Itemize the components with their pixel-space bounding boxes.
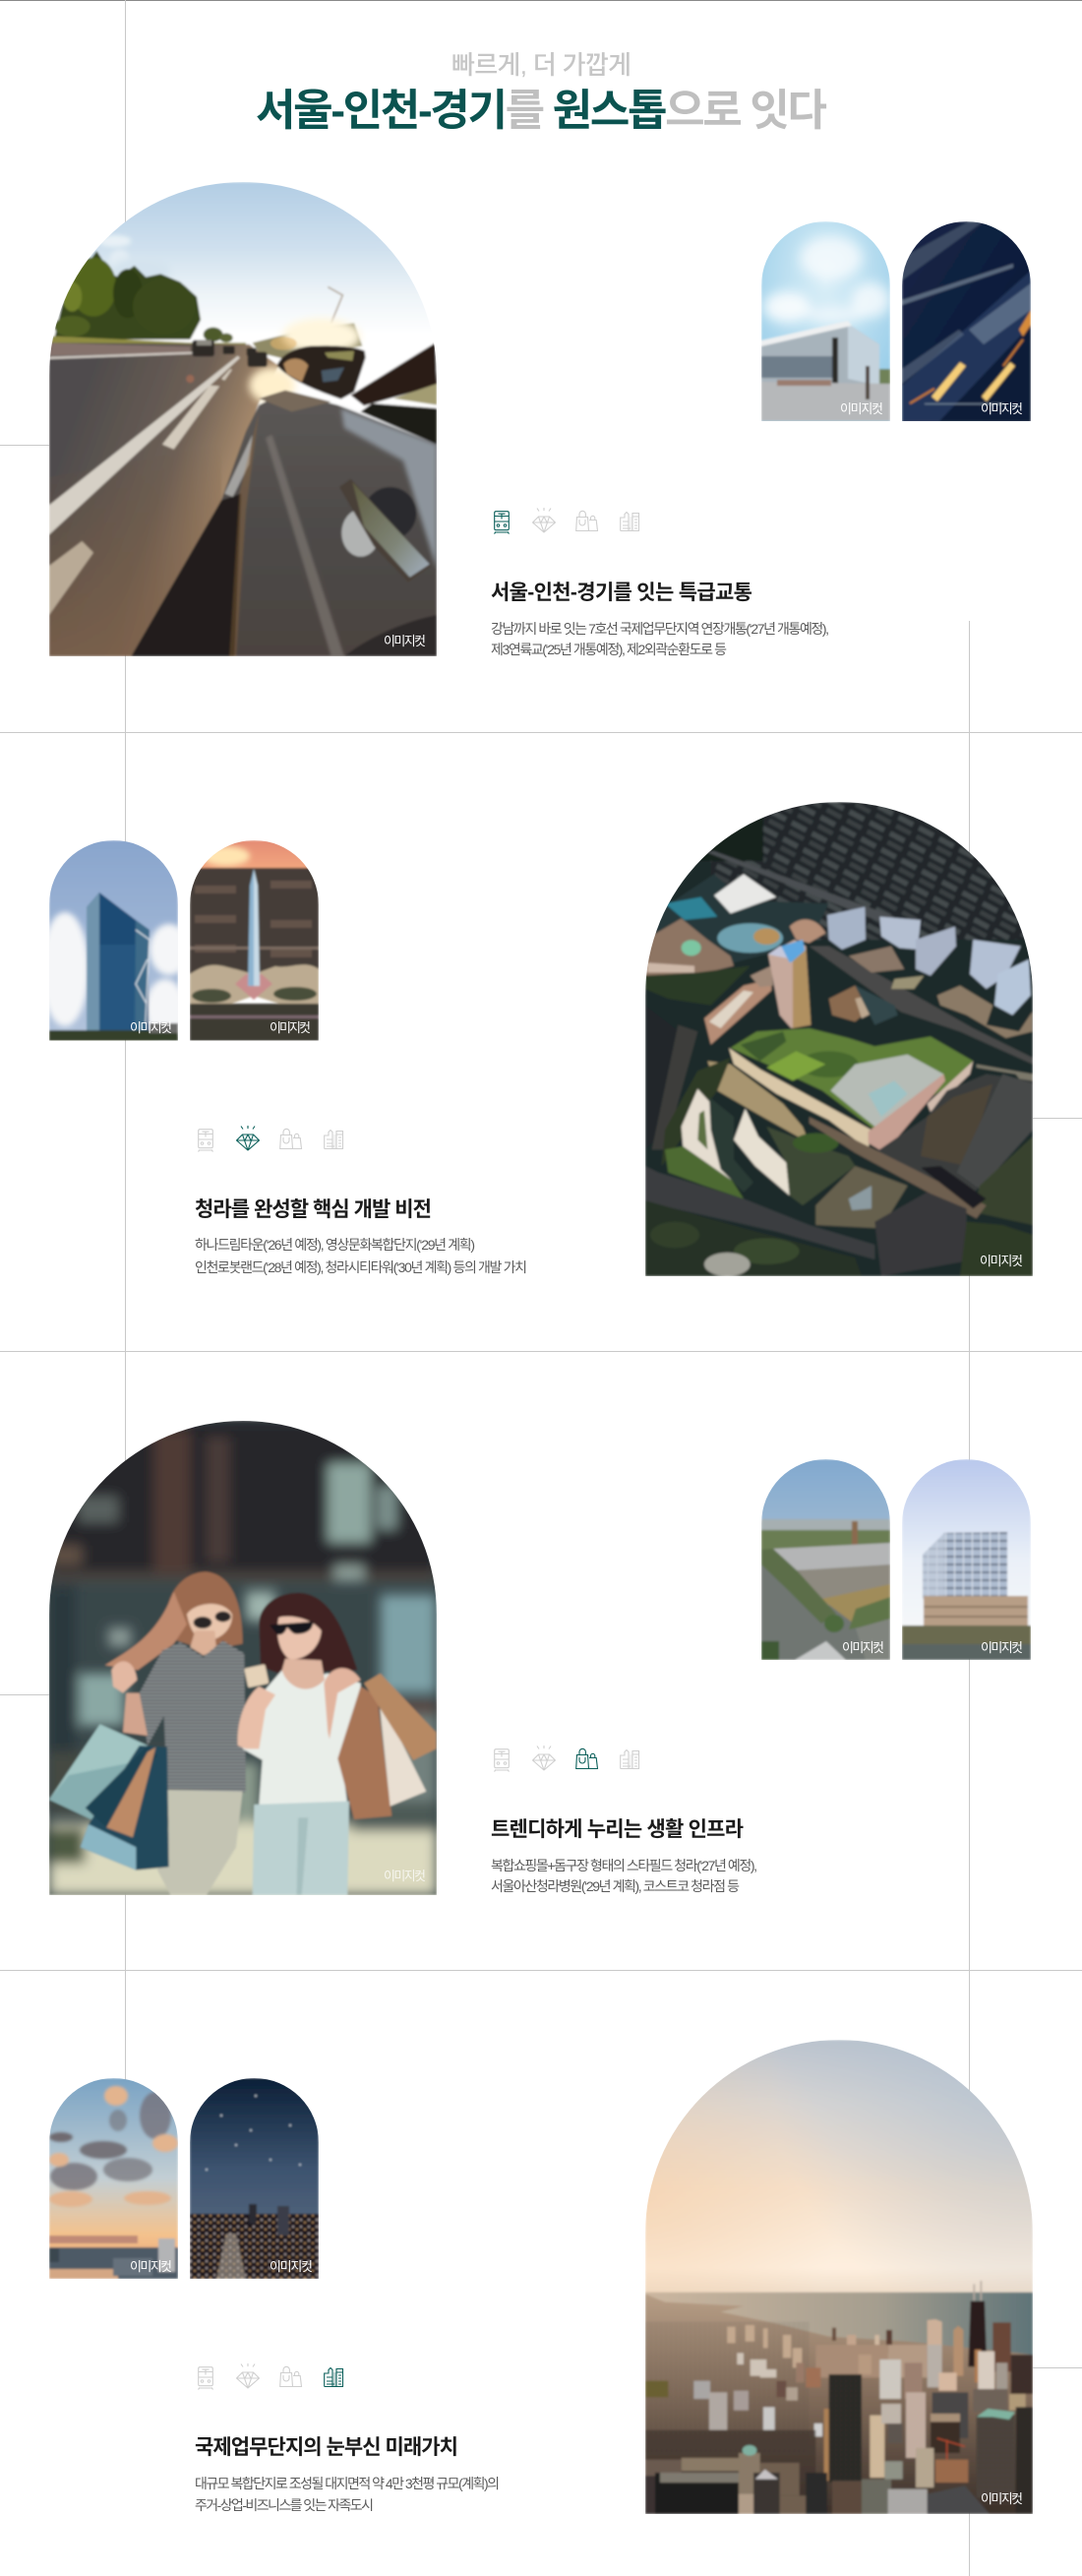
section title: 서울-인천-경기를 잇는 특급교통	[491, 582, 752, 604]
icon: diamond	[533, 1746, 555, 1770]
icon: buildings	[325, 2367, 342, 2387]
heading: subtitle: 빠르게, 더 가깝게	[451, 50, 631, 80]
image label: 이미지컷	[842, 1640, 884, 1655]
section body	[195, 1237, 527, 1275]
icon row	[494, 508, 639, 533]
photo: night highway	[902, 221, 1031, 422]
photo: night city	[190, 2078, 319, 2279]
image label: 이미지컷	[384, 634, 426, 648]
icon: shopping bags	[576, 1748, 598, 1769]
panel: development vision	[41, 802, 1033, 1276]
section body: 주거-상업-비즈니스를 잇는 자족도시	[195, 2497, 374, 2513]
panel: lifestyle infrastructure	[49, 1421, 1031, 1895]
section title: 청라를 완성할 핵심 개발 비전	[195, 1198, 432, 1221]
image label: 이미지컷	[981, 2491, 1023, 2506]
section body: 복합쇼핑몰+돔구장 형태의 스타필드 청라(‘27년 예정),	[491, 1858, 757, 1873]
section body: 하나드림타운(‘26년 예정), 영상문화복합단지(‘29년 계획)	[195, 1237, 475, 1253]
icon: shopping bags	[280, 1129, 301, 1149]
icon: buildings	[621, 1749, 639, 1769]
icon: train	[199, 1130, 212, 1151]
section body: 제3연륙교(‘25년 개통예정), 제2외곽순환도로 등	[491, 642, 727, 657]
image label: 이미지컷	[270, 1020, 311, 1035]
heading	[256, 50, 827, 135]
image label: 이미지컷	[840, 401, 883, 416]
image label: 이미지컷	[130, 1020, 172, 1035]
heading: main title: 서울-인천-경기를 원스톱으로 잇다	[256, 87, 827, 135]
icon: diamond	[236, 1126, 260, 1150]
image label: 이미지컷	[981, 1640, 1023, 1655]
icon: diamond	[533, 508, 555, 532]
icon: train	[494, 1749, 510, 1771]
photo: sunset skyscraper	[190, 840, 319, 1041]
panel: express transit	[49, 182, 1031, 657]
image label: 이미지컷	[980, 1254, 1023, 1268]
image label: 이미지컷	[981, 401, 1023, 416]
section body	[195, 2476, 500, 2513]
icon: buildings	[621, 512, 639, 531]
icon: train	[199, 2367, 212, 2389]
icon: buildings	[325, 1130, 342, 1149]
photo: aerial rendering of complex	[645, 802, 1033, 1276]
icon row	[199, 2363, 342, 2389]
photo: hospital building	[902, 1459, 1031, 1660]
photo: shopping mall aerial	[761, 1459, 890, 1660]
section body: 서울아산청라병원(‘29년 계획), 코스트코 청라점 등	[491, 1878, 740, 1894]
section body: 강남까지 바로 잇는 7호선 국제업무단지역 연장개통(‘27년 개통예정),	[491, 621, 829, 637]
photo: sunset clouds over harbor	[49, 2078, 178, 2279]
photo: car on road	[49, 182, 437, 656]
icon row	[199, 1126, 342, 1151]
photo: city skyline at dusk	[645, 2040, 1033, 2514]
panel: business district	[49, 2040, 1033, 2514]
section body	[491, 1858, 757, 1894]
section title: 트렌디하게 누리는 생활 인프라	[491, 1818, 744, 1841]
icon row	[494, 1746, 639, 1771]
image label: 이미지컷	[384, 1869, 426, 1883]
icon: diamond	[236, 2363, 260, 2388]
section body: 대규모 복합단지로 조성될 대지면적 약 4만 3천평 규모(계획)의	[195, 2476, 500, 2491]
photo: women shopping	[49, 1421, 437, 1895]
photo: glass tower	[49, 840, 178, 1041]
icon: shopping bags	[576, 511, 598, 531]
section title: 국제업무단지의 눈부신 미래가치	[195, 2436, 458, 2459]
image label: 이미지컷	[270, 2259, 313, 2274]
section body	[491, 621, 829, 657]
image label: 이미지컷	[130, 2259, 172, 2274]
section body: 인천로봇랜드(‘28년 예정), 청라시티타워(‘30년 계획) 등의 개발 가치	[195, 1259, 527, 1275]
icon: train	[494, 512, 510, 533]
icon: shopping bags	[280, 2366, 301, 2387]
photo: station under clouds	[761, 221, 890, 422]
